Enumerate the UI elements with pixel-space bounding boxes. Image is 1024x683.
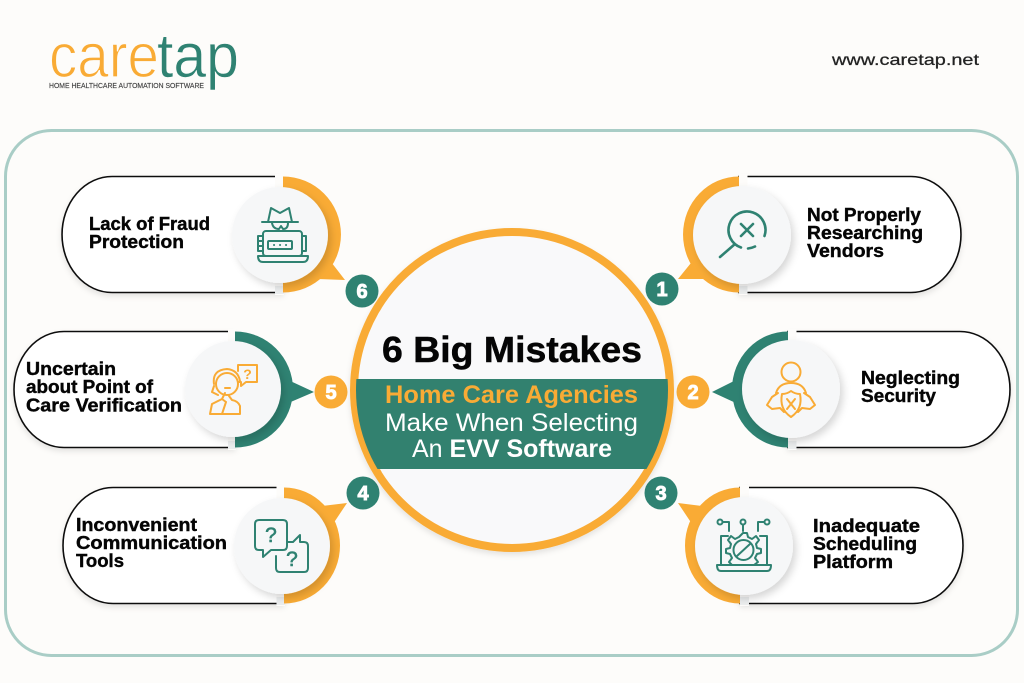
logo: caretap: care bbox=[49, 22, 159, 91]
icon circle bbox=[234, 498, 330, 594]
icon: question bubbles: ? bbox=[286, 548, 298, 571]
label bbox=[807, 205, 923, 261]
icon circle bbox=[693, 186, 791, 284]
icon: question bubbles: ? bbox=[265, 524, 277, 547]
number badge 4 bbox=[346, 476, 380, 510]
outer frame bbox=[6, 130, 1018, 656]
subheading: Make When Selecting bbox=[385, 409, 638, 437]
subheading: An EVV Software bbox=[412, 435, 612, 463]
label bbox=[76, 515, 227, 571]
number badge 5: 5 bbox=[325, 382, 337, 404]
label: about Point of bbox=[26, 377, 154, 397]
icon: question bubbles bbox=[255, 520, 308, 572]
icon: laptop with gear bbox=[717, 520, 771, 571]
panel: mistake 2 bbox=[676, 329, 1010, 450]
logo: caretap: HOME HEALTHCARE AUTOMATION SOFTWARE bbox=[49, 83, 204, 90]
label: Communication bbox=[76, 533, 227, 553]
ring and pointer bbox=[678, 488, 740, 604]
label bbox=[26, 359, 182, 416]
central circle bbox=[340, 232, 684, 548]
number badge 6 bbox=[346, 274, 378, 308]
ring and pointer bbox=[235, 332, 314, 448]
label: Lack of Fraud bbox=[89, 214, 210, 234]
icon: confused person bbox=[210, 365, 257, 414]
ring and pointer bbox=[283, 176, 345, 292]
label: Tools bbox=[76, 551, 124, 571]
label bbox=[89, 214, 210, 252]
label: Neglecting bbox=[861, 368, 960, 388]
number badge 1: 1 bbox=[656, 279, 668, 301]
panel: mistake 4 bbox=[63, 476, 380, 606]
label: Security bbox=[861, 386, 936, 406]
icon circle bbox=[232, 187, 328, 283]
icon circle bbox=[742, 340, 840, 438]
label: Platform bbox=[813, 552, 893, 572]
ring and pointer bbox=[712, 332, 788, 448]
icon: confused person: ? bbox=[243, 366, 252, 382]
icon circle bbox=[695, 497, 793, 595]
panel: mistake 6 bbox=[62, 174, 378, 308]
label: Scheduling bbox=[813, 534, 917, 554]
icon: magnifier with x bbox=[720, 212, 766, 257]
label bbox=[861, 368, 960, 406]
number badge 4: 4 bbox=[357, 483, 369, 505]
subheading: Home Care Agencies bbox=[385, 381, 638, 409]
ring and pointer bbox=[284, 488, 347, 604]
label: Not Properly bbox=[807, 205, 921, 225]
label: Care Verification bbox=[26, 396, 182, 416]
label: Uncertain bbox=[26, 359, 116, 379]
number badge 2: 2 bbox=[687, 382, 699, 404]
heading: 6 Big Mistakes bbox=[382, 329, 642, 370]
number badge 5 bbox=[314, 376, 348, 408]
panel: mistake 5 bbox=[14, 329, 347, 450]
number badge 3: 3 bbox=[655, 483, 667, 505]
ring and pointer bbox=[678, 176, 739, 292]
label: Inconvenient bbox=[76, 515, 197, 535]
teal band bbox=[340, 379, 684, 469]
number badge 6: 6 bbox=[356, 281, 368, 303]
icon circle bbox=[185, 341, 281, 437]
icon: hacker bbox=[258, 208, 308, 262]
label: Protection bbox=[89, 232, 184, 252]
label: Inadequate bbox=[813, 516, 920, 536]
panel: mistake 1 bbox=[646, 174, 961, 306]
icon: person with shield bbox=[767, 362, 815, 417]
label: Vendors bbox=[807, 241, 884, 261]
logo: caretap: tap bbox=[157, 22, 239, 91]
label bbox=[813, 516, 920, 572]
logo: caretap bbox=[49, 22, 239, 91]
number badge 2 bbox=[676, 376, 710, 408]
number badge 1 bbox=[646, 272, 678, 306]
subheading bbox=[385, 381, 638, 463]
panel: mistake 3 bbox=[644, 476, 963, 606]
label: Researching bbox=[807, 223, 923, 243]
number badge 3 bbox=[644, 476, 678, 510]
website url: www.caretap.net bbox=[831, 52, 980, 69]
